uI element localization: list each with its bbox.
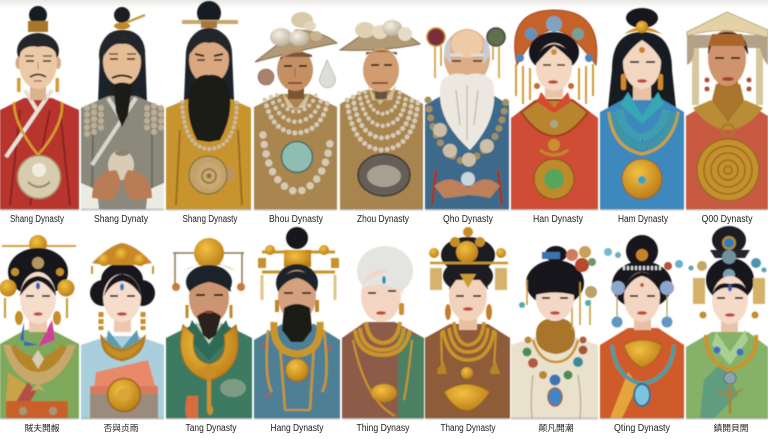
crown frame and bun bbox=[258, 227, 339, 300]
sash and waistband bbox=[6, 372, 68, 418]
hat with pearls bbox=[340, 20, 420, 50]
face and beard bbox=[99, 30, 145, 127]
panel: figure 6 Qho elder in blue bbox=[425, 28, 509, 209]
gold horse charm bbox=[371, 384, 397, 402]
panel: figure 2 Shang grey robe holding vase bbox=[81, 7, 164, 209]
panel: figure 5 Zhou tan robe bbox=[340, 20, 423, 209]
face and hair bbox=[529, 32, 579, 98]
label: row one dynasty names: Qho Dynasty bbox=[443, 214, 493, 225]
face bbox=[16, 33, 61, 92]
label: row one dynasty names bbox=[10, 214, 752, 225]
collar colours bbox=[20, 320, 55, 347]
headdress: bun and cross pin bbox=[182, 1, 238, 28]
label: row two dynasty names: Tang Dynasty bbox=[186, 423, 236, 434]
label: row one dynasty names: Ham Dynasty bbox=[618, 214, 668, 225]
panel: figure 4 Bhou tan robe with pearls bbox=[254, 12, 337, 209]
shoulder beads bbox=[87, 106, 161, 138]
label: row two dynasty names: 颠凡開潮 bbox=[538, 423, 574, 433]
panel: figure 14 Thing white-haired figure bbox=[342, 246, 424, 418]
face and goatee bbox=[186, 265, 232, 340]
face and long beard bbox=[186, 28, 232, 142]
panel: figure 10 green robe with gold crown bbox=[0, 235, 79, 418]
hairpin ornaments bbox=[427, 28, 505, 78]
label: row two dynasty names: Hang Dynasty bbox=[270, 423, 324, 434]
face bbox=[621, 36, 663, 100]
gold yoke bbox=[521, 100, 588, 136]
face bbox=[445, 270, 492, 330]
gold plaque bbox=[444, 384, 490, 411]
hair and jewelled crown bbox=[688, 226, 766, 304]
medallion: gold disc bbox=[622, 159, 662, 199]
face bbox=[624, 272, 660, 330]
panel: figure 8 Ham blue with teal necklace bbox=[600, 8, 684, 209]
gold necklace bbox=[102, 338, 144, 360]
gold necklace rows and pendants bbox=[441, 322, 496, 368]
gold collar bbox=[693, 84, 763, 136]
coloured bead necklace bbox=[522, 336, 588, 406]
hands holding vase bbox=[92, 150, 152, 200]
gold collar necklace bbox=[180, 325, 238, 415]
necklace: gold cord bbox=[14, 102, 62, 155]
teal necklace bbox=[612, 345, 674, 384]
label: row one dynasty names: Shang Dynasty bbox=[182, 214, 238, 225]
label: row two dynasty names bbox=[24, 423, 748, 434]
headdress: bun and gold band bbox=[28, 6, 48, 32]
face bbox=[535, 272, 574, 321]
gold plaque bbox=[624, 340, 662, 368]
cone hat and side poles bbox=[687, 12, 768, 105]
face bbox=[101, 274, 143, 332]
face bbox=[704, 30, 752, 98]
panel: figure 7 Han red with fan crown bbox=[511, 10, 598, 209]
crown and side tassels bbox=[429, 227, 508, 292]
hair and gold crown bbox=[90, 243, 155, 306]
panel: figure 9 Q00 with cone hat and spiral disc bbox=[686, 12, 768, 209]
panel: figure 18 light green robe with jewelled crown bbox=[686, 226, 768, 418]
necklace: teal rows bbox=[609, 92, 678, 154]
rose medallion bbox=[188, 156, 234, 194]
face and long beard bbox=[276, 264, 318, 342]
panel: figure 17 Qing orange robe bbox=[600, 235, 684, 418]
label: row two dynasty names: Thang Dynasty bbox=[440, 423, 496, 434]
crown with side tassels bbox=[172, 238, 245, 291]
face bbox=[277, 49, 313, 91]
label: row two dynasty names: 否與贞雨 bbox=[104, 423, 139, 433]
panel: figure 3 Shang mustard robe bbox=[166, 1, 251, 209]
necklace: large beads bbox=[428, 100, 506, 162]
panel: figure 11 light blue robe with hair loops bbox=[81, 243, 164, 418]
face bbox=[363, 48, 399, 92]
blue gems and pendant bbox=[714, 346, 744, 414]
hair and bun with blue ornaments bbox=[604, 235, 683, 328]
white hair bbox=[357, 246, 413, 296]
gold chains and medallion bbox=[267, 322, 327, 410]
necklace: pearl rows bbox=[263, 95, 331, 192]
medallion: jade in gold bbox=[534, 139, 574, 199]
medallion: turquoise stone bbox=[282, 142, 312, 172]
medallion: dark shell bbox=[358, 154, 410, 196]
label: row one dynasty names: Zhou Dynasty bbox=[357, 214, 409, 225]
face bbox=[15, 272, 61, 332]
label: row two dynasty names: 鎮開貝開 bbox=[714, 423, 748, 433]
gold collar bbox=[533, 318, 578, 362]
panel: figure 16 cream robe with flowers and coloured beads bbox=[511, 246, 598, 418]
medallion: gold flower bbox=[108, 378, 140, 412]
medallion: pearl disc bbox=[18, 156, 60, 198]
hair and floral headdress bbox=[519, 246, 597, 330]
label: row two dynasty names: Thing Dynasy bbox=[356, 423, 410, 434]
label: row one dynasty names: Q00 Dynasty bbox=[702, 214, 752, 225]
label: row one dynasty names: Shang Dynaty bbox=[94, 214, 148, 225]
headdress: bun and pin bbox=[114, 7, 145, 30]
crown and gold balls bbox=[0, 235, 76, 318]
face bbox=[361, 270, 404, 322]
gold necklace bbox=[3, 344, 76, 391]
label: row two dynasty names: Qting Dynasty bbox=[614, 423, 670, 434]
disc: gold spirals bbox=[697, 139, 759, 201]
hat with pearls bbox=[255, 12, 337, 62]
gold collar necklace bbox=[706, 335, 756, 370]
gold necklaces and ornament bbox=[353, 322, 412, 416]
panel: figure 12 Tang green with gold collar bbox=[166, 238, 252, 418]
panel: figure 13 Hang teal robe with crown bbox=[254, 227, 340, 418]
pendant: blue gem bbox=[634, 384, 650, 406]
hands and orb bbox=[434, 172, 500, 198]
necklace: bead strand bbox=[182, 102, 237, 149]
label: row one dynasty names: Han Dynasty bbox=[533, 214, 583, 225]
panel: figure 15 Thang brown robe with gold crown bbox=[425, 227, 510, 418]
bun and gold pin bbox=[624, 8, 662, 34]
label: row one dynasty names: Shang Dynasty bbox=[10, 214, 64, 225]
face bbox=[700, 276, 758, 332]
fan crown and tassels bbox=[515, 10, 597, 104]
label: row two dynasty names: 賊夫開赧 bbox=[24, 423, 60, 433]
bald head and white beard bbox=[440, 29, 494, 150]
necklace: pearl rows bbox=[347, 92, 418, 150]
label: row one dynasty names: Bhou Dynasty bbox=[269, 214, 323, 225]
hanging pearls bbox=[258, 60, 336, 88]
panel: figure 1 Shang red robe bbox=[0, 6, 79, 210]
